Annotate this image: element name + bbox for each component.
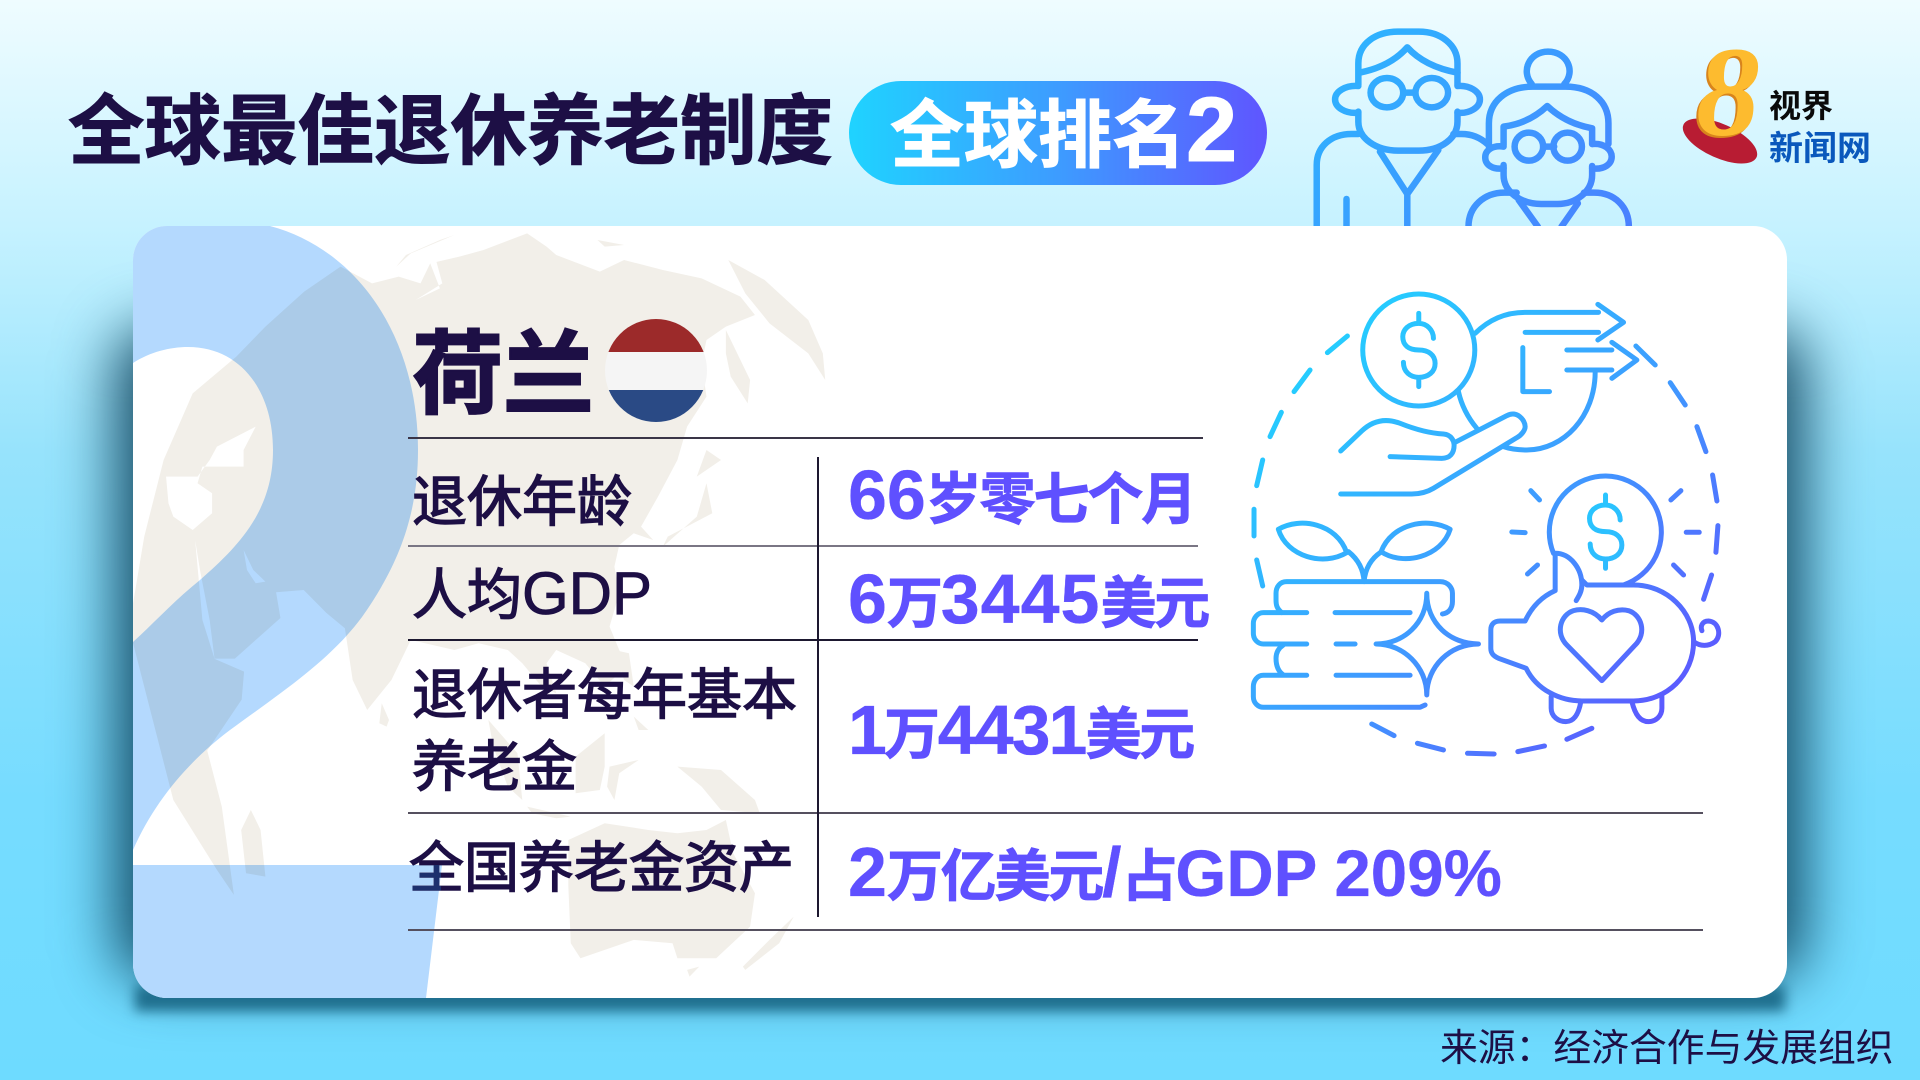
card shadow xyxy=(116,328,1804,980)
title: 全球最佳退休养老制度 xyxy=(68,90,833,175)
label: annual basic pension xyxy=(412,664,797,798)
panel: main card xyxy=(133,226,1787,998)
value: annual basic pension: 1万4431美元 xyxy=(848,691,1193,769)
label: annual basic pension: 养老金 xyxy=(412,736,577,798)
country heading: 荷兰 xyxy=(412,325,594,426)
ranking pill text: 全球排名2 xyxy=(890,79,1237,181)
logo red disc xyxy=(1677,109,1763,173)
label: annual basic pension: 退休者每年基本 xyxy=(412,664,797,726)
icon: piggy bank xyxy=(1491,476,1719,722)
value: retirement age: 66岁零七个月 xyxy=(848,456,1195,534)
logo: 8 world news xyxy=(1682,21,1871,170)
icon: plant on coins xyxy=(1253,523,1478,707)
label: retirement age: 退休年龄 xyxy=(412,471,632,533)
logo text black: 视界 xyxy=(1769,81,1833,127)
label: GDP per capita: 人均GDP xyxy=(412,560,652,627)
value: pension assets: 2万亿美元/占GDP 209% xyxy=(848,833,1502,911)
icon: Netherlands flag xyxy=(605,319,707,422)
ranking pill xyxy=(849,81,1267,185)
icon: coin and hand xyxy=(1341,294,1637,494)
card bottom shadow band xyxy=(135,985,1785,1011)
world map xyxy=(133,233,825,977)
big numeral 2 xyxy=(133,226,442,998)
source note: 来源：经济合作与发展组织 xyxy=(1440,1028,1894,1070)
label: pension assets: 全国养老金资产 xyxy=(409,837,794,899)
numeral overlap tint on text xyxy=(408,865,441,897)
dashed ring xyxy=(1254,336,1718,754)
logo numeral 8: 8 xyxy=(1696,21,1760,163)
logo text blue: 新闻网 xyxy=(1769,121,1871,170)
value: GDP per capita: 6万3445美元 xyxy=(848,560,1208,638)
world map and big rank numeral xyxy=(133,226,825,998)
inland seas xyxy=(166,257,442,659)
icon: elderly couple xyxy=(1313,28,1632,226)
